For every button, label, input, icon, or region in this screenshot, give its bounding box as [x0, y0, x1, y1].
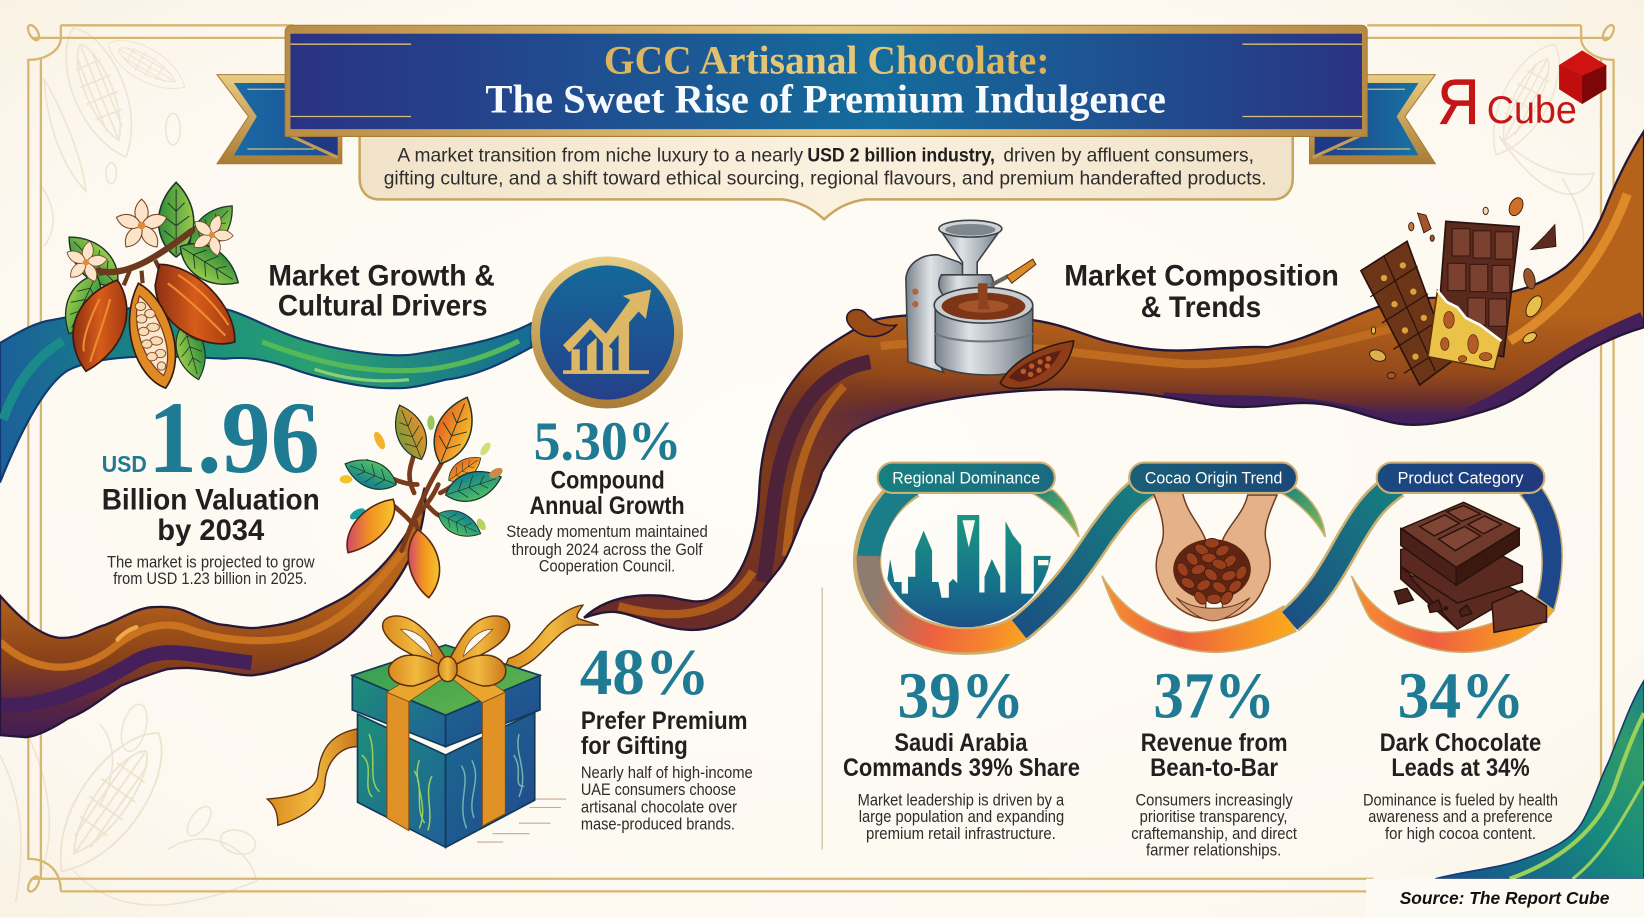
title line 2: The Sweet Rise of Premium Indulgence — [485, 76, 1166, 121]
icon: chocolate bars — [1361, 195, 1556, 385]
description: artisanal chocolate over — [581, 799, 738, 817]
s-curve 1 to 2 — [1019, 485, 1148, 629]
value: 34% — [1398, 659, 1524, 732]
dark bar — [1436, 221, 1519, 357]
spout — [939, 275, 994, 304]
heading: Prefer Premium — [581, 707, 748, 735]
description — [858, 791, 1065, 843]
yellow pod — [347, 499, 395, 553]
stat: compound annual growth — [506, 410, 708, 576]
subtitle line 1: USD 2 billion industry, — [807, 145, 995, 167]
ribbon tail: left — [217, 75, 342, 164]
subtitle line 1 — [397, 145, 1254, 167]
icon: colourful cocoa branch — [340, 391, 506, 598]
heading: Compound — [550, 467, 665, 495]
description: The market is projected to grow — [107, 553, 315, 571]
ribbon tail: right — [1310, 75, 1435, 164]
watermark: cocoa pods top left — [40, 18, 193, 247]
teal ribbon: bottom right corner — [1435, 681, 1644, 879]
stat: dark chocolate — [1363, 659, 1558, 843]
subtitle line 1: driven by affluent consumers, — [1003, 145, 1254, 167]
grinder body — [906, 255, 975, 372]
ribbon tail right — [503, 605, 599, 671]
logo wordmark — [1437, 66, 1577, 138]
lid — [352, 675, 446, 747]
heading — [581, 707, 748, 760]
title banner — [285, 25, 1367, 136]
section heading: growth: Market Growth & — [268, 259, 495, 292]
description — [1363, 791, 1558, 843]
ring 1 — [867, 485, 1079, 641]
title line 1: GCC Artisanal Chocolate: — [604, 38, 1050, 83]
right pod — [155, 264, 235, 344]
description: Steady momentum maintained — [506, 523, 708, 541]
box body — [358, 714, 446, 847]
infinity ribbon with category rings — [867, 485, 1562, 652]
teal-green ribbon — [0, 305, 532, 482]
description: large population and expanding — [859, 808, 1064, 826]
description: for high cocoa content. — [1385, 825, 1536, 843]
chocolate ribbon: central wave to right edge — [566, 131, 1644, 640]
pill: product category: Product Category — [1398, 468, 1524, 487]
ribbon tail left — [267, 729, 358, 825]
stat: Saudi Arabia share — [843, 659, 1080, 843]
description — [107, 553, 315, 588]
heading: for Gifting — [581, 732, 688, 760]
heading: Dark Chocolate — [1380, 729, 1541, 757]
subtitle line 2: gifting culture, and a shift toward ethical sourcing, regional flavours, and premium handerafted products. — [384, 168, 1267, 190]
heading: Billion Valuation — [102, 484, 320, 517]
pill: cocoa origin trend: Cocao Origin Trend — [1145, 468, 1282, 487]
cocoa beans — [1173, 538, 1251, 606]
description: through 2024 across the Golf — [512, 541, 703, 559]
ring 3 — [1351, 485, 1562, 652]
crumbs and nuts — [1368, 195, 1556, 379]
pill: product category — [1377, 463, 1544, 493]
value: 37% — [1153, 659, 1275, 732]
ribbon straps — [387, 692, 409, 831]
source note: Source: The Report Cube — [1400, 888, 1609, 908]
heading: Annual Growth — [529, 492, 685, 520]
heading — [843, 729, 1080, 782]
logo wordmark: Я — [1437, 66, 1479, 138]
pill: regional dominance: Regional Dominance — [892, 468, 1040, 487]
description: UAE consumers choose — [581, 781, 736, 799]
icon: gift box — [267, 605, 599, 847]
description: awareness and a preference — [1368, 808, 1553, 826]
funnel — [939, 229, 1001, 275]
pill: cocoa origin trend — [1129, 463, 1297, 493]
heading — [1141, 729, 1288, 782]
left pod — [73, 280, 127, 371]
value: 39% — [897, 659, 1024, 732]
logo: RCube — [1437, 50, 1606, 138]
ring 2 orange arc — [1102, 576, 1296, 652]
handle — [991, 276, 1009, 285]
icon: hands holding cocoa beans — [1153, 493, 1277, 621]
icon: cocoa pods and blossom branch — [55, 182, 247, 388]
description: Dominance is fueled by health — [1363, 791, 1558, 809]
section heading: growth — [268, 259, 495, 323]
orange pod — [408, 530, 440, 598]
thin vertical divider — [821, 587, 823, 849]
description: premium retail infrastructure. — [866, 825, 1056, 843]
heading: Leads at 34% — [1391, 754, 1530, 782]
subtitle line 1: A market transition from niche luxury to a nearly — [397, 145, 803, 167]
stat: market valuation — [102, 381, 320, 588]
description — [506, 523, 708, 576]
value: 48% — [580, 636, 710, 709]
section heading: growth: Cultural Drivers — [278, 290, 488, 323]
description — [581, 764, 753, 833]
center pod — [129, 283, 175, 388]
description: Nearly half of high-income — [581, 764, 753, 782]
description: mase-produced brands. — [581, 815, 735, 833]
value: USD — [102, 451, 147, 477]
heading — [529, 467, 685, 520]
heading — [102, 484, 320, 547]
section heading: composition: Market Composition — [1064, 259, 1339, 292]
watermark: cocoa pods bottom left — [0, 702, 258, 905]
description: craftemanship, and direct — [1131, 825, 1297, 843]
heading: Saudi Arabia — [894, 729, 1028, 757]
heading: by 2034 — [157, 514, 265, 547]
subtitle panel — [360, 134, 1293, 219]
s-curve 2 to 3 — [1290, 485, 1397, 621]
bar with nuts — [1361, 241, 1451, 385]
description: Consumers increasingly — [1135, 791, 1294, 809]
pot — [935, 306, 1033, 375]
value: 1.96 — [148, 381, 320, 495]
description — [1131, 791, 1297, 860]
watermark: cocoa pods top right — [1476, 34, 1594, 262]
heading: Commands 39% Share — [843, 754, 1080, 782]
stat: premium gifting — [580, 636, 753, 833]
icon: stacked dark chocolate — [1394, 502, 1546, 632]
broken nut bar — [1428, 291, 1501, 369]
icon: chocolate grinder — [906, 220, 1074, 388]
section heading: composition: & Trends — [1141, 291, 1261, 324]
section heading: composition — [1064, 259, 1339, 324]
pill: regional dominance — [878, 463, 1055, 493]
value: 5.30% — [534, 410, 682, 472]
description: prioritise transparency, — [1140, 808, 1288, 826]
chocolate ribbon: lower left — [0, 488, 425, 737]
description: Market leadership is driven by a — [858, 791, 1065, 809]
description: farmer relationships. — [1146, 842, 1281, 860]
bow — [383, 616, 510, 686]
skyline disc — [881, 515, 1053, 629]
heading: Revenue from — [1141, 729, 1288, 757]
description: from USD 1.23 billion in 2025. — [113, 570, 307, 588]
stat: bean-to-bar revenue — [1131, 659, 1297, 860]
source note — [1366, 879, 1644, 918]
logo cube — [1559, 50, 1606, 104]
icon: growth chart badge — [531, 256, 683, 409]
cocoa pod — [1000, 341, 1074, 388]
logo wordmark: Cube — [1487, 89, 1577, 132]
heading: Bean-to-Bar — [1150, 754, 1278, 782]
heading — [1380, 729, 1541, 782]
description: Cooperation Council. — [539, 558, 675, 576]
